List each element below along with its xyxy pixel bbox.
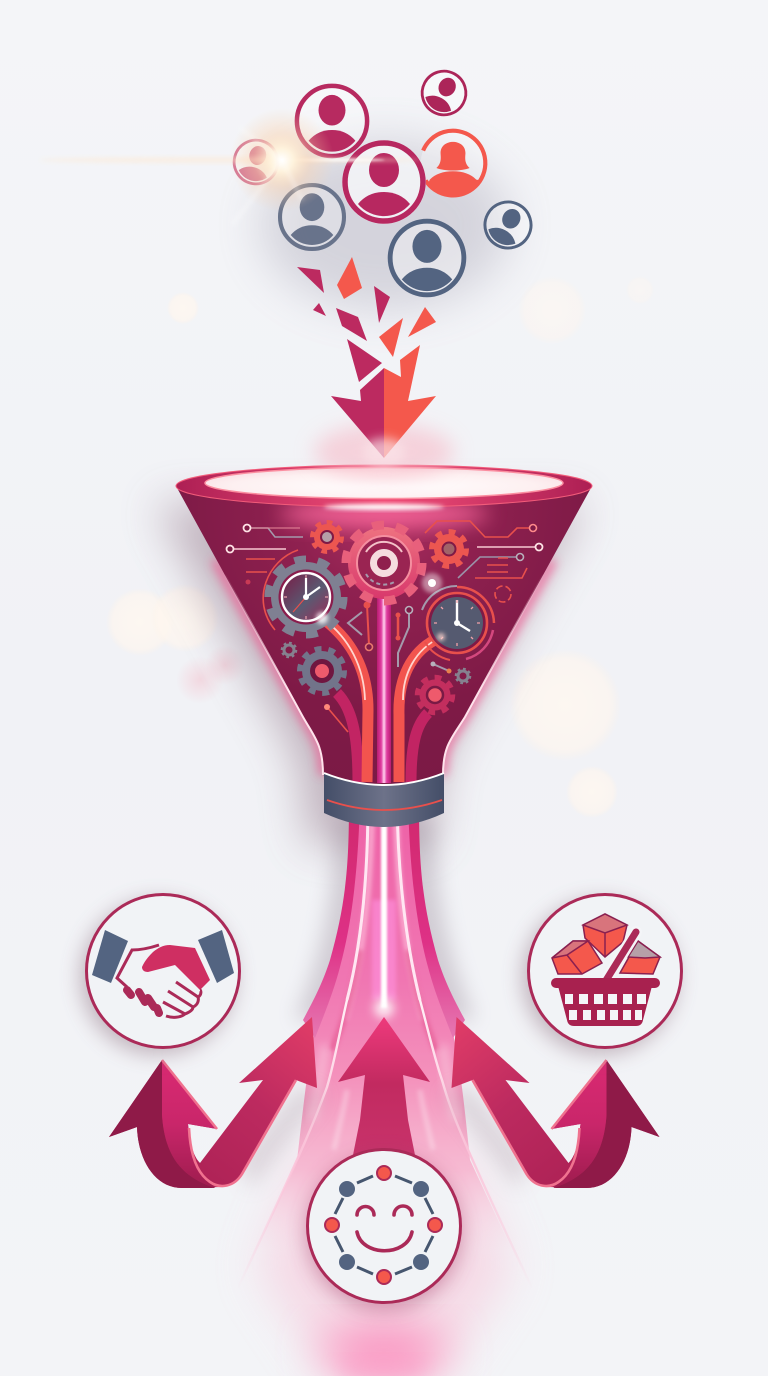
badge shadow: [522, 899, 678, 1055]
lens flare: [40, 108, 420, 225]
person icon: small gray right: [477, 194, 539, 256]
gear: small gray right: [456, 669, 470, 683]
funnel collar: [324, 773, 444, 827]
gear: crimson right: [418, 678, 452, 712]
arrow shadow: [240, 1085, 325, 1190]
gear with clock: left: [269, 560, 343, 634]
darker fold: [109, 1060, 215, 1188]
gear: gray lower: [300, 649, 344, 693]
people icon group: [229, 63, 539, 295]
glow above funnel: [314, 424, 454, 480]
sparkle: [422, 573, 442, 593]
person icon: small crimson top: [414, 63, 474, 123]
smiling face: [357, 1206, 412, 1251]
smile network badge: [306, 1150, 462, 1310]
gear: central pink: [346, 525, 422, 601]
light stream out of funnel: [237, 800, 533, 1290]
edge highlights: [472, 1060, 606, 1186]
person icon: coral woman: [421, 131, 485, 195]
head highlight: [162, 1060, 217, 1188]
central beam: [377, 578, 391, 783]
person icon: faint left: [229, 135, 283, 189]
circuit lines: [233, 521, 536, 732]
bokeh lights: [106, 276, 654, 818]
stream streaks: [312, 810, 456, 1150]
basket badge: [522, 894, 682, 1055]
right arrow: [444, 1017, 660, 1190]
handshake icon: [92, 930, 234, 1017]
clock face: [278, 570, 334, 624]
bottom pink glow: [258, 1150, 512, 1376]
center white beam: [381, 800, 387, 1008]
shadow behind people icons: [260, 140, 510, 310]
person icon: gray left: [280, 185, 344, 249]
gear: small orange left: [312, 522, 342, 552]
edge highlights: [162, 1060, 296, 1186]
funnel: [176, 465, 592, 827]
arrow shadow: [444, 1085, 528, 1190]
center arrow: [338, 1017, 430, 1165]
funnel outer glow: [215, 560, 553, 775]
stream side band right: [408, 800, 465, 1038]
network links: [335, 1176, 433, 1274]
left arrow: [109, 1017, 325, 1190]
head highlight: [552, 1060, 606, 1188]
funnel shadow: [156, 504, 584, 844]
long light lines: [237, 800, 368, 1290]
flow tubes: [322, 618, 441, 782]
badge shadow: [80, 899, 236, 1055]
stream side band left: [303, 800, 360, 1038]
badge shadow: [306, 1154, 462, 1310]
falling shards: [297, 257, 436, 382]
circuit nodes: [226, 524, 542, 710]
darker fold: [554, 1060, 660, 1188]
funnel opening: [205, 468, 563, 498]
gear: orange right: [432, 532, 466, 566]
handshake badge: [80, 894, 240, 1055]
basket slots: [565, 994, 646, 1020]
basket body: [558, 986, 652, 1026]
person icon: large crimson: [297, 86, 367, 156]
stream shadow: [295, 820, 475, 1020]
person icon: center crimson: [342, 140, 426, 224]
down arrow: [331, 345, 436, 466]
boxes: [620, 941, 660, 974]
tube glow tips: [316, 612, 445, 641]
clock face: [431, 597, 483, 649]
funnel body: [176, 486, 592, 788]
clock: right: [422, 586, 494, 660]
funnel rim: [176, 465, 592, 507]
stream core: [256, 800, 512, 1250]
network nodes: [325, 1166, 442, 1284]
handle: [605, 932, 636, 982]
person icon: large gray: [390, 221, 464, 295]
rim light: [324, 504, 444, 510]
gear: small gray left: [282, 643, 296, 657]
top pink glow inside funnel: [279, 500, 489, 528]
basket icon: [551, 914, 660, 1026]
funnel edge highlight: [225, 575, 543, 775]
